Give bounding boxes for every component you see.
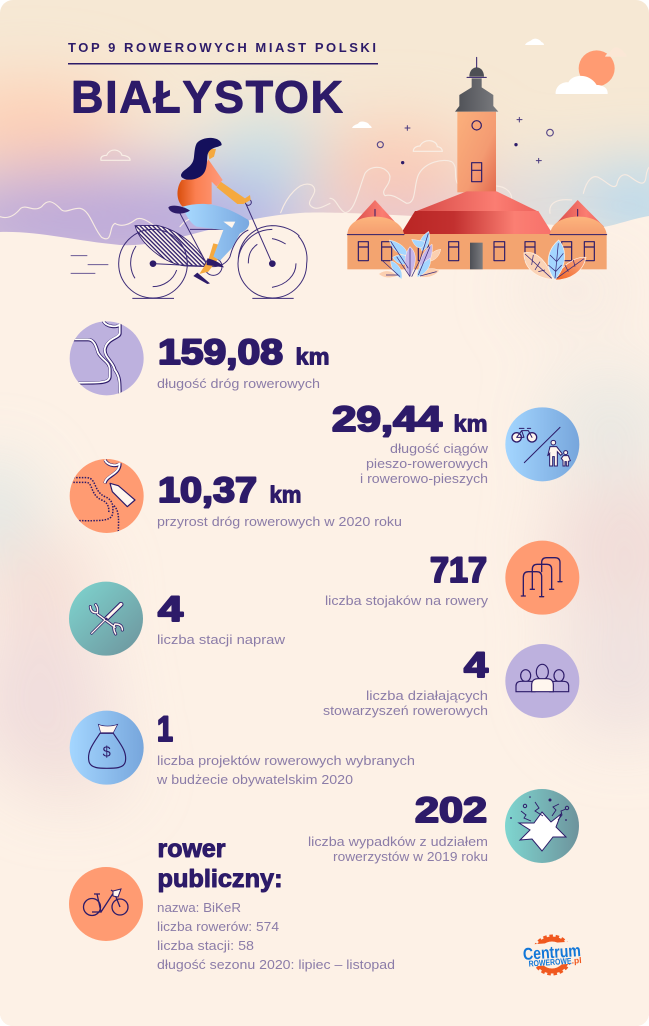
icon: group of people [505, 644, 579, 718]
value: 10,37 [158, 471, 257, 510]
stat: ciagi pieszo-rowerowe: km [454, 410, 488, 436]
label: stowarzyszeń rowerowych [323, 703, 488, 718]
value: 717 [430, 551, 487, 590]
icon: explosion [505, 789, 579, 863]
label: liczba działających [366, 688, 488, 703]
wavy white lines [0, 160, 649, 239]
label: pieszo-rowerowych [366, 456, 488, 471]
label: przyrost dróg rowerowych w 2020 roku [157, 514, 402, 529]
hill [0, 213, 649, 1026]
icon: wrench and screwdriver [69, 582, 143, 656]
stat: ciagi pieszo-rowerowe [332, 400, 579, 486]
stat: stowarzyszenia [323, 644, 579, 718]
label: rowerzystów w 2019 roku [333, 849, 488, 864]
label: liczba projektów rowerowych wybranych [157, 753, 415, 768]
label: długość dróg rowerowych [157, 376, 320, 391]
details [157, 900, 395, 972]
stat: dlugosc drog rowerowych: km [296, 344, 330, 370]
logo: Centrum Rowerowe [517, 936, 585, 974]
label [308, 834, 488, 864]
sky colour blobs [0, 85, 649, 277]
plant left [379, 231, 441, 279]
label: i rowerowo-pieszych [360, 471, 488, 486]
value: 29,44 [332, 400, 443, 439]
lower colour blobs [0, 366, 649, 796]
bicycle [119, 199, 307, 298]
logo: Centrum Rowerowe: .pl [571, 955, 582, 966]
label [156, 753, 415, 787]
rider [168, 138, 251, 284]
label: długość ciągów [390, 441, 489, 456]
sparkles [377, 117, 553, 164]
illustration: cyclist [71, 138, 307, 298]
icon: money bag: $ [103, 745, 111, 761]
speed lines [71, 256, 108, 273]
top heading: TOP 9 ROWEROWYCH MIAST POLSKI [68, 40, 376, 55]
label: liczba stacji napraw [157, 632, 286, 647]
illustration: sky details and town hall [347, 39, 627, 280]
stat: przyrost drog: km [270, 482, 302, 508]
small outline cloud [101, 150, 130, 160]
stat: dlugosc drog rowerowych [70, 321, 330, 395]
plant left veins [382, 233, 437, 277]
details: liczba stacji: 58 [157, 938, 254, 953]
value: 159,08 [158, 333, 283, 372]
stat: budzet obywatelski [70, 710, 415, 787]
main roof [401, 191, 553, 234]
label [323, 688, 488, 718]
heading: rower [158, 835, 226, 863]
icon: money bag [70, 711, 144, 785]
sun and clouds [352, 39, 627, 151]
label: liczba stojaków na rowery [325, 593, 489, 608]
value: 4 [464, 646, 489, 685]
heading [158, 835, 282, 893]
details: nazwa: BiKeR [157, 900, 241, 915]
label [360, 441, 489, 486]
details: długość sezonu 2020: lipiec – listopad [157, 957, 395, 972]
icon: drawn road [70, 459, 144, 533]
stat: przyrost drog [70, 459, 402, 533]
plant right veins [525, 243, 584, 278]
label: liczba wypadków z udziałem [308, 834, 488, 849]
windows and door [358, 242, 594, 269]
icon: bicycle and pedestrians [505, 407, 579, 481]
icon: road map [70, 321, 144, 395]
hatched leaf [135, 225, 208, 267]
plant right [524, 240, 586, 280]
section: rower publiczny [69, 835, 395, 972]
label: w budżecie obywatelskim 2020 [156, 772, 353, 787]
title: BIAŁYSTOK [71, 72, 344, 122]
side wings [347, 200, 607, 269]
value: 4 [158, 590, 184, 629]
logo: Centrum Rowerowe: Centrum [522, 941, 581, 964]
heading: publiczny: [158, 865, 282, 893]
stat: stacje napraw [69, 582, 286, 656]
stat: wypadki [308, 789, 579, 864]
value: 202 [415, 791, 487, 830]
header text [68, 40, 378, 122]
value: 1 [157, 710, 173, 749]
tower [455, 57, 498, 192]
stat: stojaki [325, 541, 579, 615]
icon: bike racks [505, 541, 579, 615]
icon: public bike [69, 867, 143, 941]
details: liczba rowerów: 574 [157, 919, 279, 934]
logo: Centrum Rowerowe: ROWEROWE [528, 956, 572, 969]
